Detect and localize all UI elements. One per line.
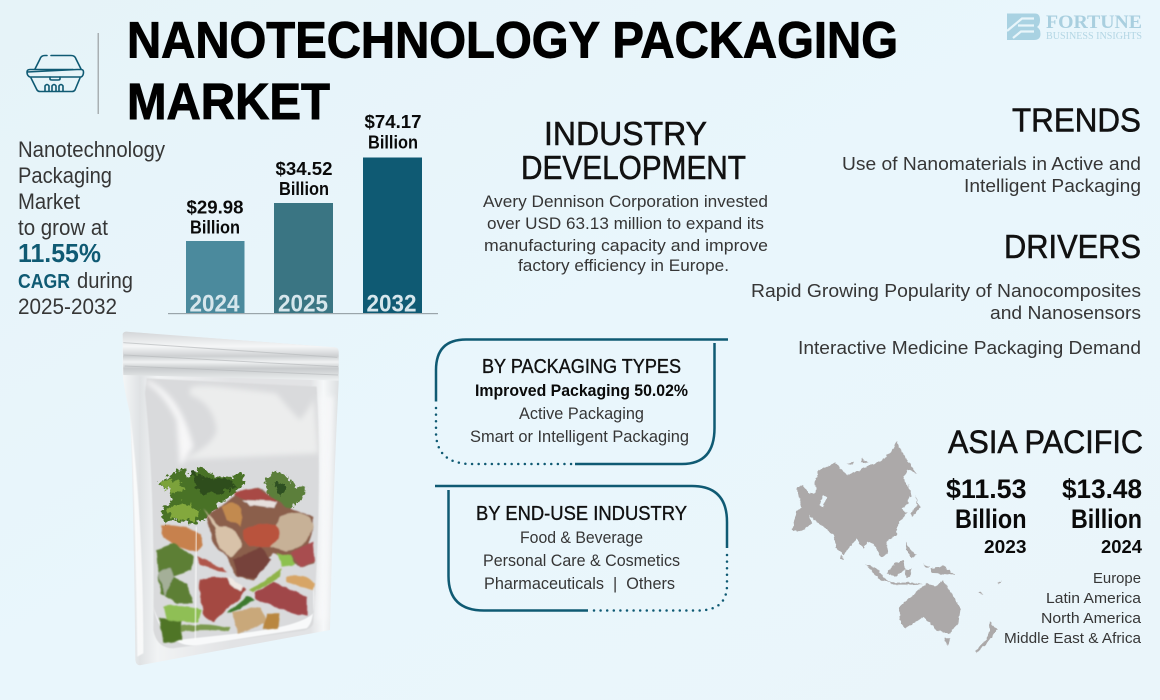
panel: by end-use industry: Pharmaceuticals | Others	[484, 575, 675, 593]
stat: 2024 value: 2024	[1101, 537, 1142, 557]
text block: CAGR summary	[18, 137, 165, 319]
text block: other regions	[1004, 571, 1142, 647]
bar: 2032: Billion	[368, 132, 418, 152]
panel: by packaging types	[436, 340, 728, 464]
panel: drivers	[751, 228, 1141, 358]
bar: 2024: 2024	[190, 290, 240, 318]
text block: CAGR summary: CAGR	[18, 271, 70, 293]
panel: trends: Use of Nanomaterials in Active and	[842, 153, 1141, 174]
stat: 2023 value: 2023	[984, 537, 1026, 557]
bar: 2024	[186, 196, 244, 318]
bar: 2032: 2032	[366, 290, 416, 318]
icon: food container	[27, 56, 84, 92]
bar: 2032	[363, 111, 422, 318]
logo: Fortune Business Insights	[1007, 12, 1142, 42]
text block: investment note: factory efficiency in Europe.	[518, 257, 729, 275]
panel: trends	[842, 102, 1141, 196]
panel: by packaging types: BY PACKAGING TYPES	[482, 356, 681, 378]
panel: by end-use industry: Food & Beverage	[520, 529, 643, 547]
text block: other regions: Latin America	[1046, 591, 1142, 607]
meat and vegetables	[157, 488, 315, 643]
panel: asia pacific	[792, 424, 1143, 653]
panel: by packaging types: Improved Packaging 50.02%	[475, 382, 688, 400]
logo: Fortune Business Insights: FORTUNE	[1046, 12, 1142, 33]
text block: investment note: Avery Dennison Corporation invested	[483, 193, 768, 211]
text block: CAGR summary: during	[77, 268, 133, 293]
heading: industry development: INDUSTRY	[544, 115, 707, 152]
herbs	[158, 467, 307, 525]
text block: CAGR summary: Nanotechnology	[18, 137, 165, 162]
food contents	[157, 467, 315, 643]
panel: by packaging types: Smart or Intelligent Packaging	[470, 428, 689, 446]
text block: CAGR summary: to grow at	[18, 215, 108, 240]
text block: other regions: Europe	[1093, 571, 1141, 587]
panel: by packaging types: Active Packaging	[519, 405, 644, 423]
stat: 2024 value	[1062, 474, 1142, 557]
text block: other regions: Middle East & Africa	[1004, 631, 1142, 647]
text block: investment note: over USD 63.13 million to expand its	[487, 215, 764, 233]
logo: Fortune Business Insights: BUSINESS INSIGHTS	[1046, 31, 1142, 42]
text block: CAGR summary: Market	[18, 189, 80, 214]
stat: 2023 value: $11.53	[946, 474, 1026, 504]
panel: drivers: and Nanosensors	[990, 302, 1141, 323]
stat: 2023 value	[946, 474, 1026, 557]
heading: industry development: DEVELOPMENT	[521, 149, 746, 186]
stat: 2024 value: $13.48	[1062, 474, 1142, 504]
bar: 2032: $74.17	[364, 111, 422, 132]
panel: by end-use industry: BY END-USE INDUSTRY	[476, 503, 687, 525]
bar: 2025: $34.52	[276, 158, 332, 179]
panel: drivers: DRIVERS	[1004, 228, 1141, 265]
panel: asia pacific: ASIA PACIFIC	[948, 424, 1143, 460]
map: asia pacific	[792, 442, 1002, 653]
text block: CAGR summary: 2025-2032	[18, 294, 117, 319]
panel: by end-use industry: Personal Care & Cosmetics	[483, 552, 680, 570]
stat: 2024 value: Billion	[1071, 504, 1142, 534]
text block: investment note	[483, 193, 768, 275]
text block: CAGR summary: Packaging	[18, 163, 112, 188]
heading: industry development	[521, 115, 746, 186]
panel: industry development	[483, 115, 768, 275]
panel: drivers: Interactive Medicine Packaging Demand	[798, 337, 1141, 358]
text block: investment note: manufacturing capacity and improve	[484, 237, 768, 255]
panel: drivers: Rapid Growing Popularity of Nanocomposites	[751, 280, 1141, 301]
bar: 2025: Billion	[279, 178, 329, 199]
bar: 2025	[274, 158, 333, 318]
title	[127, 12, 898, 130]
title: NANOTECHNOLOGY PACKAGING	[127, 12, 898, 68]
bar chart	[168, 111, 438, 318]
text block: CAGR summary: 11.55%	[18, 238, 101, 268]
panel: by end-use industry	[435, 486, 727, 610]
panel: trends: TRENDS	[1012, 102, 1141, 138]
panel: trends: Intelligent Packaging	[964, 175, 1141, 196]
illustration: clear pouch with food	[123, 332, 339, 665]
stat: 2023 value: Billion	[955, 504, 1026, 534]
bar: 2024: $29.98	[186, 196, 244, 218]
bar: 2025: 2025	[278, 290, 328, 318]
divider line	[98, 33, 99, 114]
bar: 2024: Billion	[190, 216, 240, 238]
title: MARKET	[127, 73, 330, 130]
text block: other regions: North America	[1041, 611, 1142, 627]
